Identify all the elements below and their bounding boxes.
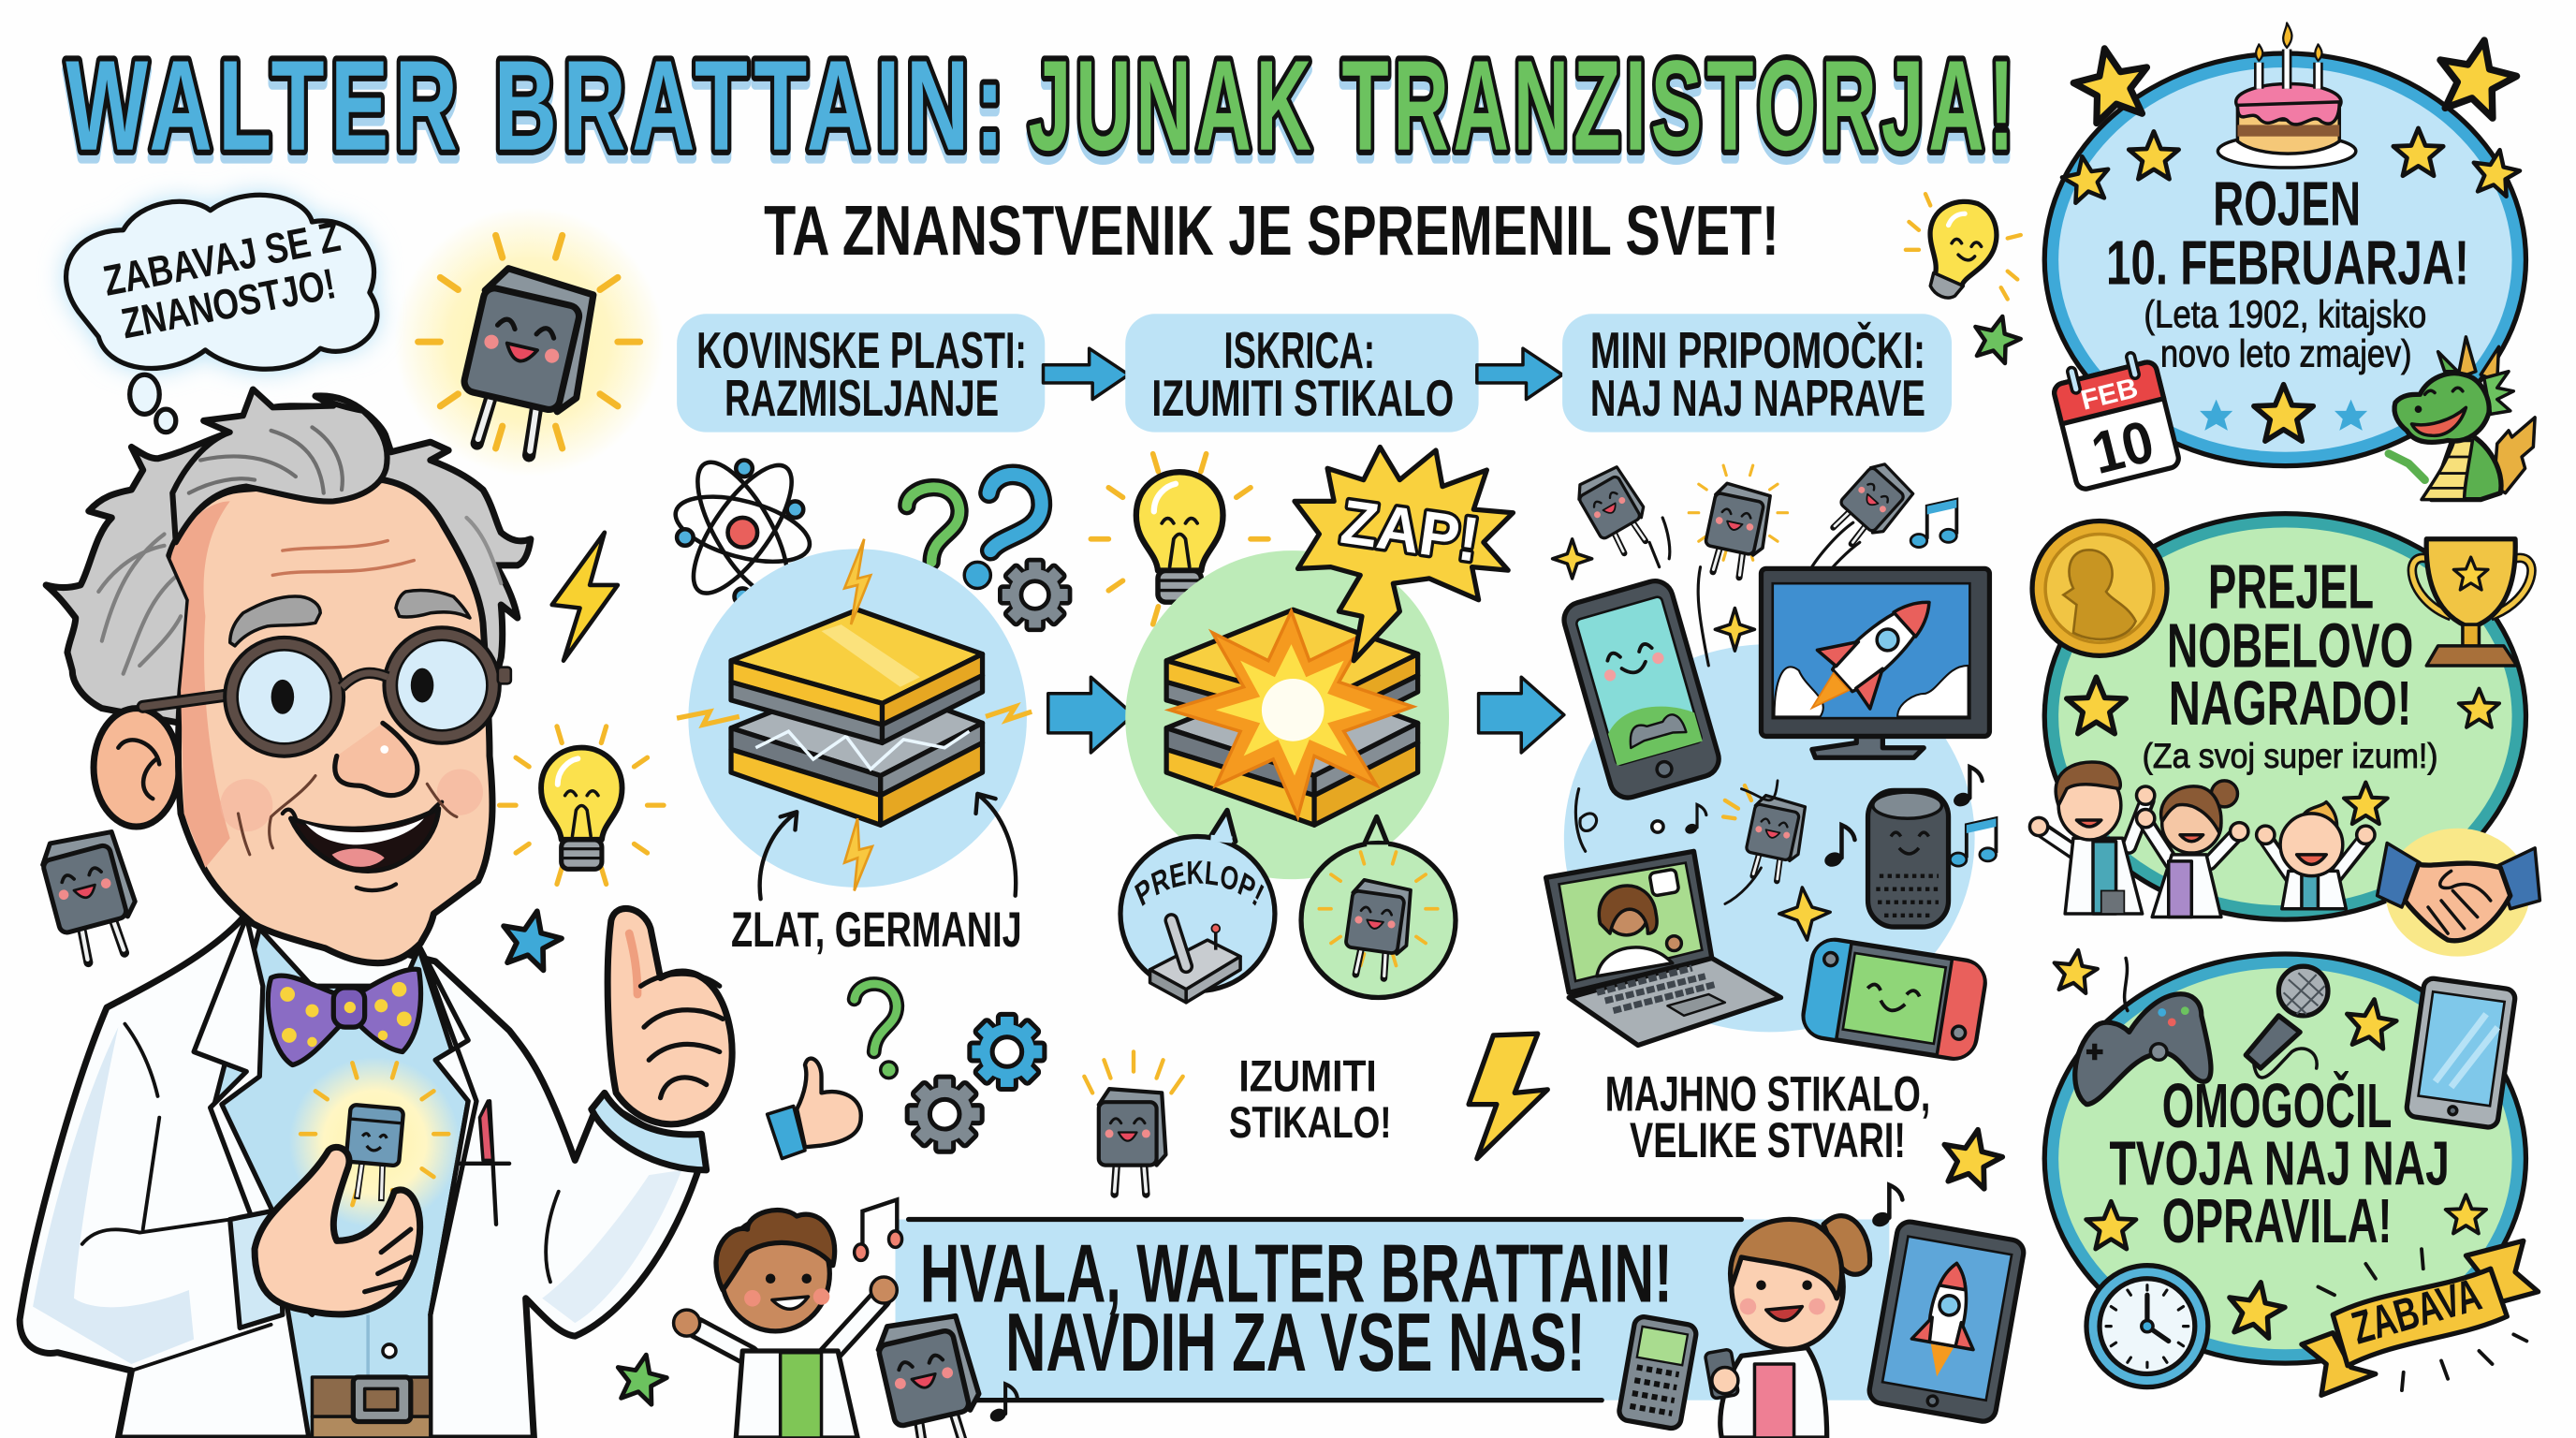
label: gold, germanium: ZLAT, GERMANIJ xyxy=(731,902,1022,958)
scientist Walter Brattain xyxy=(20,389,732,1438)
smart speaker xyxy=(1868,790,1949,927)
gears xyxy=(970,1014,1045,1089)
icon: transistor at boy xyxy=(873,1310,990,1438)
girl character xyxy=(1705,1216,1870,1438)
shirt xyxy=(213,929,468,1438)
music note xyxy=(1910,500,1956,548)
eyebrows xyxy=(230,596,320,646)
calendar: 10 xyxy=(2086,408,2160,487)
hair xyxy=(46,389,531,723)
small thumbs up xyxy=(768,1059,861,1159)
panel: Nobel prize: NAGRADO! xyxy=(2169,669,2411,739)
panel: metal plates xyxy=(677,539,1032,899)
flow label: mini gadgets xyxy=(1562,314,1952,433)
icon: question marks xyxy=(907,475,1042,588)
icon: music note xyxy=(855,1199,902,1260)
pocket and pens xyxy=(460,1101,509,1225)
subtitle: TA ZNANSTVENIK JE SPREMENIL SVET! xyxy=(764,191,1779,270)
thumbs-up hand xyxy=(592,908,732,1170)
arrow xyxy=(1043,348,1129,400)
flow label: mini gadgets: MINI PRIPOMOČKI: xyxy=(1590,322,1925,379)
icon: ZAP burst: ZAP! xyxy=(1337,488,1484,576)
thought bubble: ZNANOSTJO! xyxy=(118,259,340,347)
rocket xyxy=(1786,573,1955,738)
bow tie xyxy=(268,969,420,1065)
dragon xyxy=(2389,337,2535,500)
icon: star xyxy=(1938,1123,2007,1191)
upper plate xyxy=(731,609,983,742)
ribbon: fun: ZABAVA xyxy=(2347,1269,2487,1355)
nose xyxy=(335,723,417,796)
electric sparks xyxy=(755,731,970,770)
icon: tablet with rocket xyxy=(1867,1220,2026,1423)
title: WALTER BRATTAIN: xyxy=(66,42,1004,185)
scientist one xyxy=(2029,762,2155,914)
flow label: metal layers: KOVINSKE PLASTI: xyxy=(696,322,1027,379)
caption: invent the switch: IZUMITI xyxy=(1238,1052,1377,1102)
caption: small switch, big things xyxy=(1605,1067,1930,1168)
panel: Nobel prize xyxy=(2029,511,2539,957)
flow label: metal layers: RAZMISLJANJE xyxy=(724,370,999,427)
icon: blue star xyxy=(496,905,566,973)
scientist three xyxy=(2257,783,2388,909)
thank-you banner xyxy=(896,1220,1889,1401)
panel: born: (Leta 1902, kitajsko xyxy=(2144,292,2426,335)
title: JUNAK TRANZISTORJA! xyxy=(1029,34,2014,177)
boy character xyxy=(674,1211,897,1438)
flow label: spark: IZUMITI STIKALO xyxy=(1151,370,1454,427)
laptop xyxy=(1546,851,1781,1045)
arrow xyxy=(1048,677,1134,753)
sparkle xyxy=(1779,888,1830,940)
stars xyxy=(2051,947,2486,1340)
bubble: transistor xyxy=(1301,816,1456,998)
front hair tuft xyxy=(172,389,388,542)
flying transistors xyxy=(1573,459,1917,666)
ribbon: fun xyxy=(2302,1240,2539,1395)
decor: thumb, question, gears xyxy=(768,984,1045,1159)
icon: glowing transistor xyxy=(394,207,664,477)
panel: born xyxy=(2042,23,2535,500)
sparkles xyxy=(1553,539,1754,651)
stars xyxy=(2067,677,2499,734)
small transistor xyxy=(1723,781,1808,903)
transistor held in hand xyxy=(289,1057,460,1227)
thank-you banner: HVALA, WALTER BRATTAIN! xyxy=(920,1227,1673,1319)
stars xyxy=(2059,32,2523,441)
green question mark xyxy=(855,984,897,1051)
thank-you banner: NAVDIH ZA VSE NAS! xyxy=(1005,1297,1586,1388)
clock xyxy=(2086,1266,2208,1387)
trophy xyxy=(2412,539,2531,666)
icon: gear xyxy=(1000,560,1070,630)
icon: green star xyxy=(612,1350,670,1406)
holding hand xyxy=(230,1147,420,1328)
medal xyxy=(2032,521,2167,655)
thought bubble xyxy=(66,195,377,433)
icon: atom xyxy=(668,449,816,609)
lab coat xyxy=(20,914,701,1438)
handshake xyxy=(2378,829,2539,957)
flow label: spark: ISKRICA: xyxy=(1224,322,1375,379)
panel: everyday fun: OMOGOČIL xyxy=(2162,1071,2392,1141)
flow label: metal layers xyxy=(677,314,1045,433)
icon: lightning bolt xyxy=(552,533,618,661)
TV xyxy=(1761,568,1989,757)
lapels xyxy=(194,917,312,1314)
calendar: FEB xyxy=(2078,373,2141,417)
gamepad xyxy=(2075,958,2211,1105)
smile xyxy=(238,776,457,890)
panel: Nobel prize: NOBELOVO xyxy=(2167,612,2413,682)
glasses xyxy=(143,628,511,756)
icon: smiling light bulb xyxy=(500,726,664,884)
panel: everyday fun xyxy=(2042,947,2539,1395)
caption: small switch, big things: MAJHNO STIKALO, xyxy=(1605,1067,1930,1123)
curved arrows xyxy=(760,812,797,899)
title: JUNAK TRANZISTORJA! xyxy=(1029,42,2014,185)
icon: calculator xyxy=(1617,1315,1697,1430)
caption: invent the switch xyxy=(1229,1052,1392,1148)
panel: devices xyxy=(1546,459,1996,1062)
flow label: spark xyxy=(1125,314,1479,433)
title xyxy=(66,34,2014,185)
thought bubble: ZABAVAJ SE Z xyxy=(99,213,344,305)
icon: smiling bulb top right xyxy=(1906,194,2021,299)
phone xyxy=(1559,577,1723,802)
icon: music note xyxy=(988,1384,1017,1424)
bubble: switch xyxy=(1118,807,1278,1005)
switch xyxy=(1150,940,1240,990)
panel: everyday fun: OPRAVILA! xyxy=(2162,1187,2392,1256)
caption: invent the switch: STIKALO! xyxy=(1229,1098,1392,1148)
panel: born: novo leto zmajev) xyxy=(2160,331,2411,374)
three scientists xyxy=(2029,762,2388,917)
game console xyxy=(1801,937,1988,1062)
lower plate xyxy=(731,677,983,825)
icon: lightning bolt xyxy=(1469,1034,1547,1159)
title: WALTER BRATTAIN: xyxy=(66,34,1004,177)
belt xyxy=(312,1377,431,1438)
arrow xyxy=(1477,348,1562,400)
icon: light bulb xyxy=(1090,454,1268,624)
icon: transistor with rays xyxy=(1084,1051,1183,1194)
icon: ZAP burst xyxy=(1295,447,1513,661)
music notes xyxy=(1575,767,1996,869)
top and bottom bolts xyxy=(844,539,871,624)
ear xyxy=(94,709,179,827)
panel: Nobel prize: (Za svoj super izum!) xyxy=(2143,737,2438,775)
panel: born: ROJEN xyxy=(2213,169,2361,239)
panel: spark xyxy=(1125,550,1449,879)
tablet xyxy=(2406,977,2516,1128)
cake xyxy=(2217,23,2356,168)
icon: green star xyxy=(1969,310,2025,365)
icon: music note xyxy=(1870,1185,1902,1229)
head xyxy=(169,480,492,963)
scientist two xyxy=(2137,781,2248,917)
flow label: mini gadgets: NAJ NAJ NAPRAVE xyxy=(1590,370,1925,427)
icon: small transistor left xyxy=(38,826,147,967)
arrow xyxy=(1479,677,1564,753)
microphone xyxy=(2246,966,2328,1078)
bubble: switch: PREKLOP! xyxy=(1134,860,1264,906)
explosion xyxy=(1170,611,1412,816)
caption: small switch, big things: VELIKE STVARI! xyxy=(1630,1113,1906,1168)
calendar xyxy=(2049,347,2181,492)
panel: Nobel prize: PREJEL xyxy=(2208,553,2374,623)
